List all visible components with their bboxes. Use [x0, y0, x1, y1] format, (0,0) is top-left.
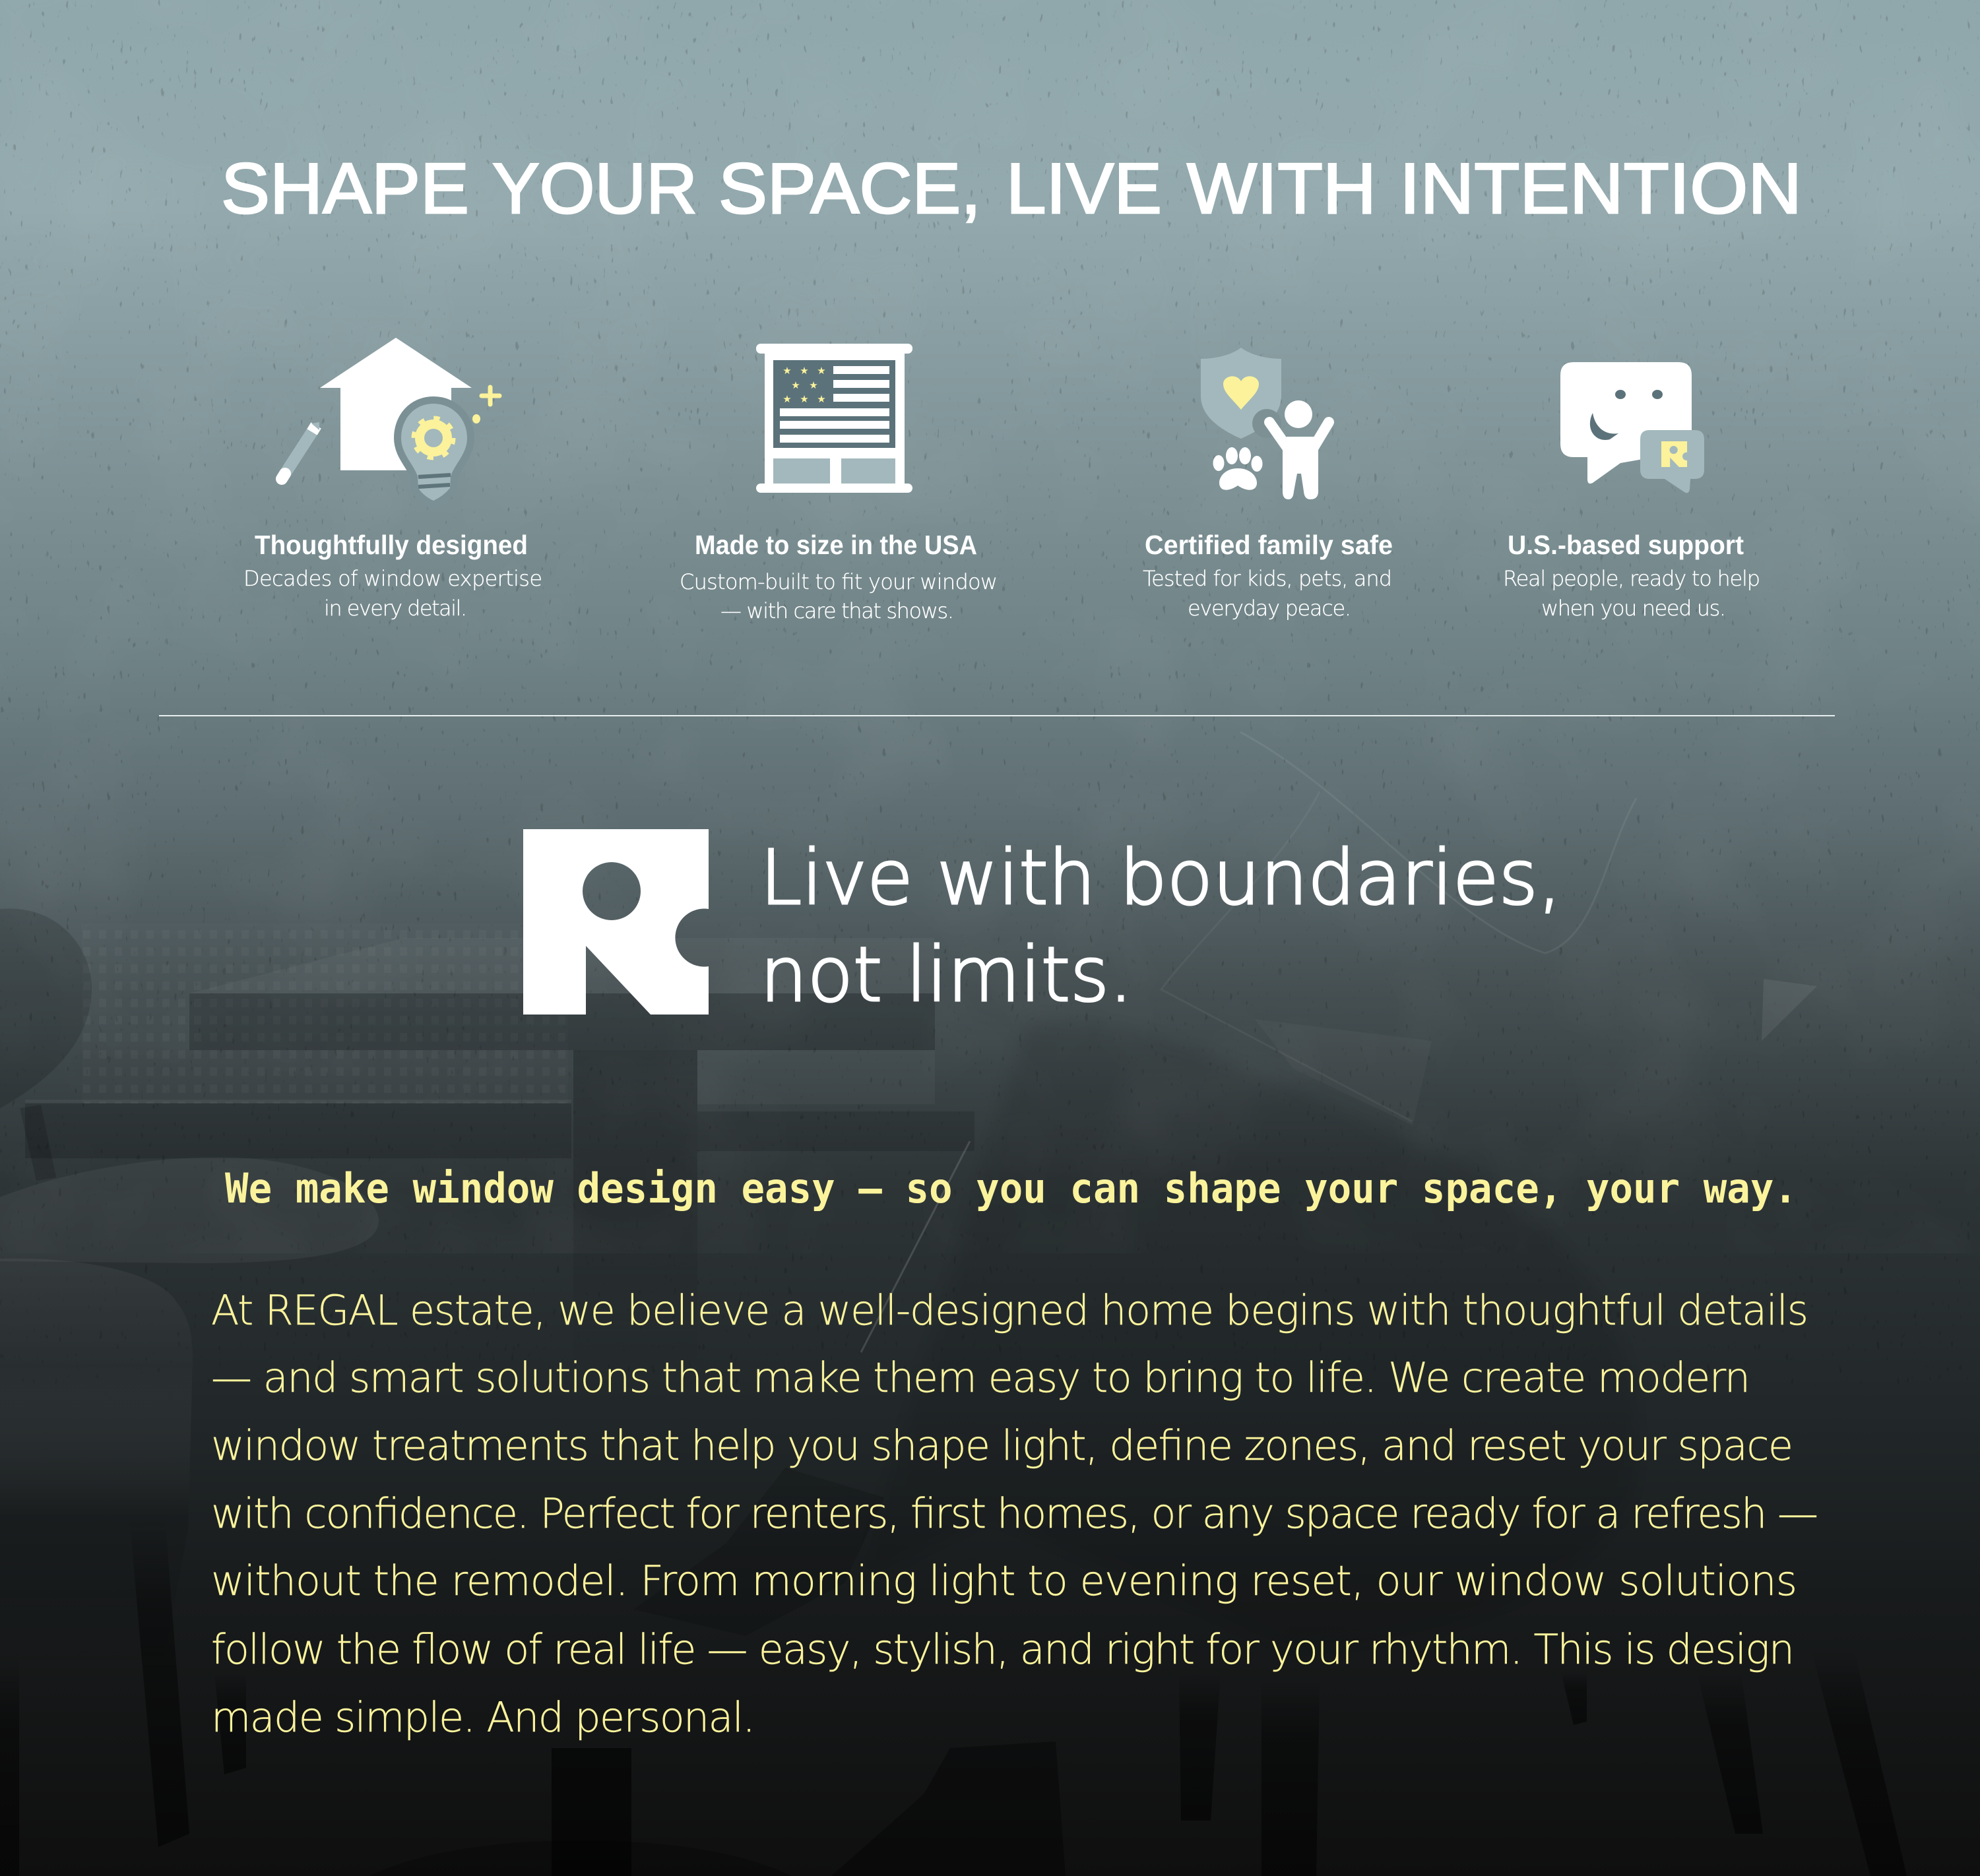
body paragraph: with confidence. Perfect for renters, first homes, or any space ready for a refresh — [211, 1489, 1818, 1538]
icon: window shade with flag: ★ [817, 393, 826, 405]
title: WITH [1187, 148, 1376, 229]
title: LIVE [1006, 148, 1162, 229]
heading: Made to size in the USA [695, 530, 977, 560]
icon: window shade with flag: ★ [791, 379, 800, 391]
feature: made to size in the USA [680, 344, 998, 623]
slogan: Live with boundaries, [760, 834, 1562, 922]
logo: R mark [523, 829, 709, 1015]
body paragraph: — and smart solutions that make them easy to bring to life. We create modern [211, 1354, 1750, 1402]
description: Real people, ready to help [1503, 566, 1760, 591]
title: YOUR [492, 148, 697, 229]
title [221, 148, 1802, 229]
icon: window shade with flag: ★ [782, 365, 792, 377]
tagline: We make window design easy — so you can shape your space, your way. [225, 1164, 1797, 1212]
description: — with care that shows. [720, 598, 954, 623]
description: everyday peace. [1188, 596, 1351, 621]
icon: window shade with flag: ★ [817, 365, 826, 377]
description [1503, 566, 1760, 621]
description [680, 569, 998, 623]
body paragraph: without the remodel. From morning light to evening reset, our window solutions [211, 1557, 1797, 1605]
title: SHAPE [221, 148, 469, 229]
icon: window shade with flag: ★ [782, 393, 792, 405]
heading: U.S.-based support [1508, 530, 1744, 560]
icon: shield, paw and child [1201, 348, 1329, 499]
description [1143, 566, 1392, 621]
icon: window shade with flag: ★ [800, 393, 809, 405]
body paragraph [211, 1286, 1818, 1741]
icon: window shade with flag [756, 344, 912, 493]
feature: U.S.-based support [1503, 362, 1760, 621]
body paragraph: At REGAL estate, we believe a well-designed home begins with thoughtful details [211, 1286, 1808, 1334]
description [243, 566, 542, 621]
feature: certified family safe [1143, 348, 1393, 621]
title: SPACE, [719, 148, 981, 229]
icon: window shade with flag: ★ [809, 379, 818, 391]
feature: thoughtfully designed [243, 338, 542, 621]
description: in every detail. [324, 596, 467, 621]
heading: Certified family safe [1145, 530, 1393, 560]
icon: smiling speech bubbles [1560, 362, 1704, 493]
description: Tested for kids, pets, and [1143, 566, 1392, 591]
description: when you need us. [1541, 596, 1726, 621]
title: INTENTION [1399, 148, 1802, 229]
description: Custom-built to fit your window [680, 569, 998, 594]
body paragraph: made simple. And personal. [211, 1693, 755, 1741]
slogan [760, 834, 1562, 1018]
description: Decades of window expertise [243, 566, 542, 591]
slogan: not limits. [760, 931, 1133, 1018]
icon: window shade with flag: ★ [800, 365, 809, 377]
heading: Thoughtfully designed [255, 530, 528, 560]
body paragraph: follow the flow of real life — easy, stylish, and right for your rhythm. This is design [211, 1625, 1795, 1673]
body paragraph: window treatments that help you shape light, define zones, and reset your space [211, 1422, 1793, 1470]
icon: house with light bulb and pencil [282, 338, 499, 501]
